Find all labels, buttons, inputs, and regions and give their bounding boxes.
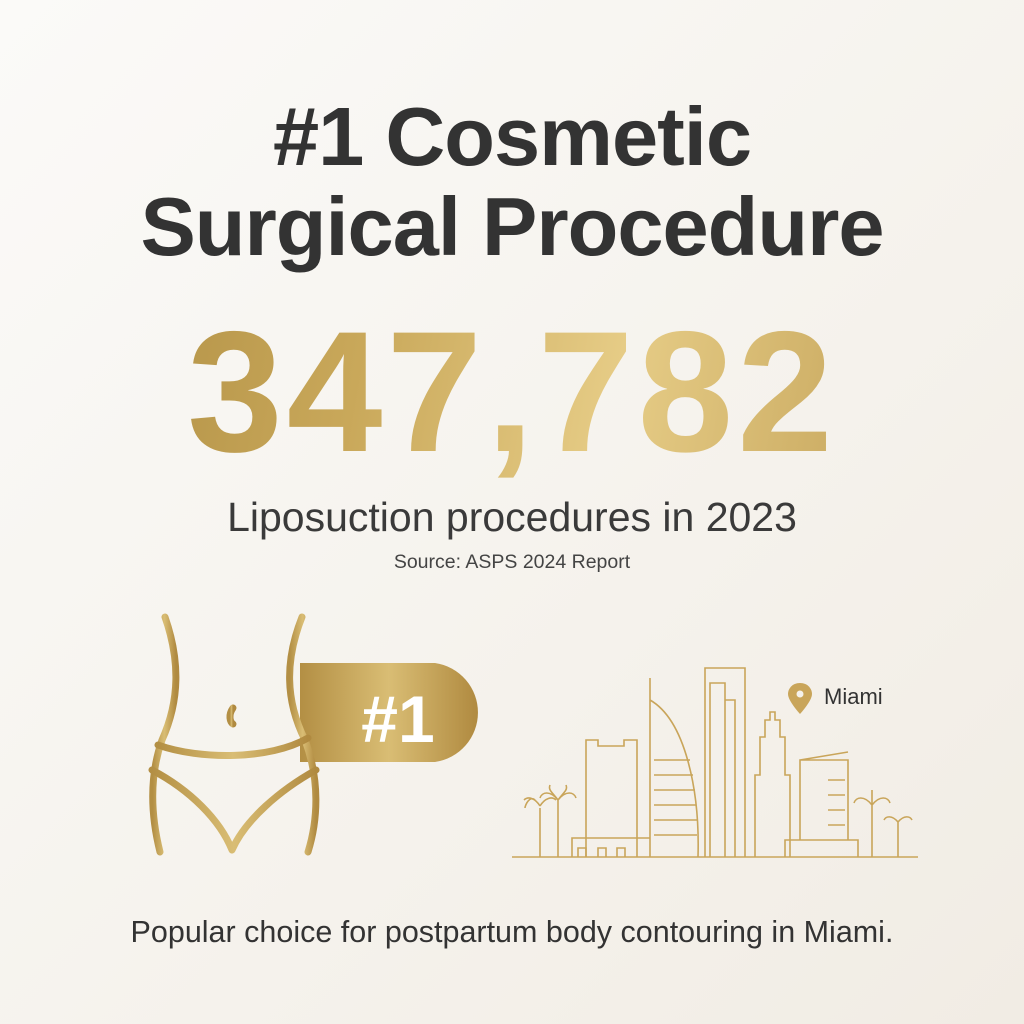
icon: map pin <box>788 683 812 714</box>
title <box>140 90 884 273</box>
big number: 347,782 <box>187 296 837 488</box>
icon: waist body <box>152 617 316 852</box>
label: Miami: Miami <box>824 684 883 709</box>
title: Surgical Procedure <box>140 180 884 273</box>
footer text: Popular choice for postpartum body contouring in Miami. <box>131 915 893 949</box>
big number <box>0 302 1024 482</box>
badge #1 <box>300 663 478 762</box>
icon: Miami skyline <box>512 668 918 857</box>
illustration: body icon and badge <box>148 614 918 858</box>
subtitle: Liposuction procedures in 2023 <box>227 494 797 540</box>
source: Source: ASPS 2024 Report <box>394 551 630 573</box>
badge #1: #1 <box>361 682 435 756</box>
title: #1 Cosmetic <box>273 90 751 183</box>
